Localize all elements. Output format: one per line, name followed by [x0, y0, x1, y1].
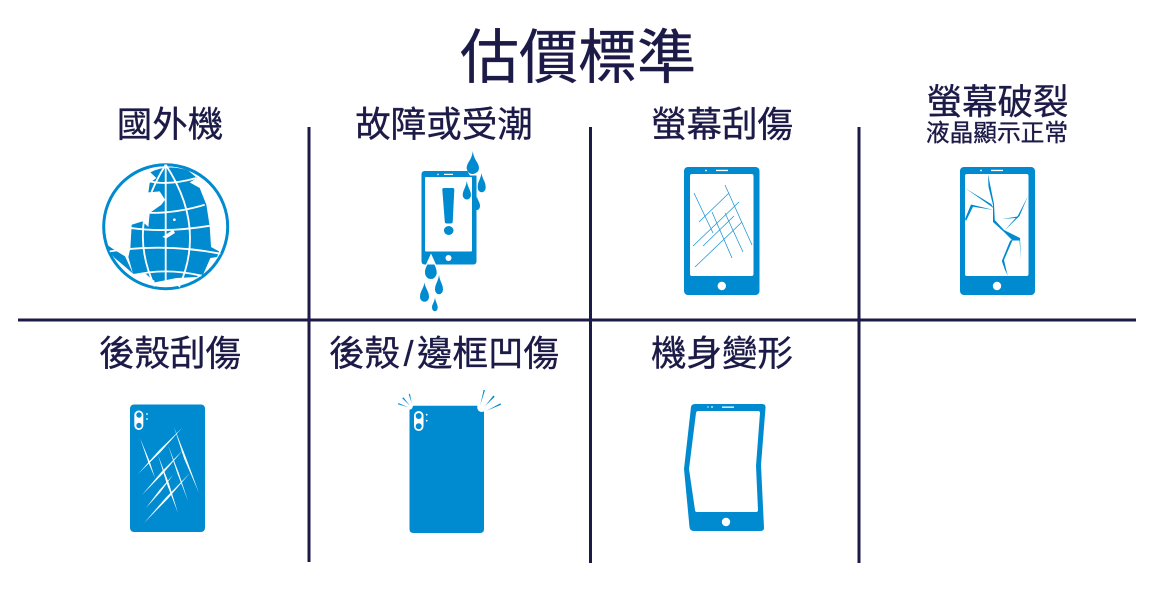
heading: cracked screen: 液晶顯示正常 — [926, 120, 1068, 147]
heading: back or frame dents: 後殼/邊框凹傷 — [329, 334, 559, 374]
heading: overseas phone: 國外機 — [117, 104, 223, 144]
heading: faulty or water damaged: 故障或受潮 — [355, 104, 533, 144]
icon: phone back with dented corners — [398, 390, 501, 533]
icon: exclamation mark — [442, 188, 454, 235]
icon: phone back with scratches — [130, 404, 205, 532]
cracks — [965, 174, 1028, 276]
heading: bent body: 機身變形 — [651, 334, 793, 374]
icon: globe — [104, 165, 228, 289]
scratches — [693, 185, 752, 267]
water drops — [420, 151, 486, 311]
heading: cracked screen: 螢幕破裂 — [926, 82, 1069, 122]
heading: back scratches: 後殼刮傷 — [99, 334, 241, 374]
icon: phone with cracked screen — [960, 167, 1035, 295]
impact marks — [398, 390, 501, 411]
icon: phone with scratched screen — [684, 167, 760, 295]
heading: cracked screen — [926, 82, 1069, 147]
title: 估價標準 — [460, 25, 696, 91]
heading: screen scratches: 螢幕刮傷 — [651, 104, 793, 144]
icon: phone with water drops — [420, 151, 486, 311]
icon: bent phone — [684, 404, 766, 531]
scratches — [138, 427, 199, 523]
